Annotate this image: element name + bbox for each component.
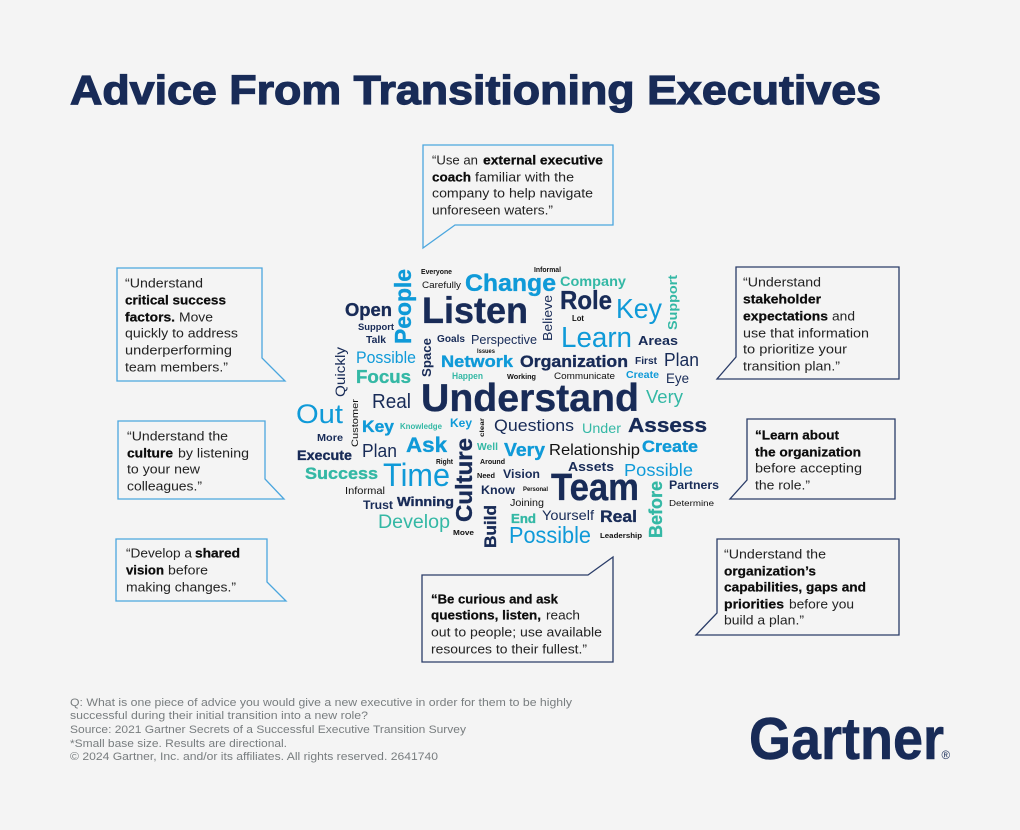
callout: stakeholder expectations: transition plan.” xyxy=(743,359,840,374)
callout: stakeholder expectations: “Understand xyxy=(743,275,821,290)
footnote: *Small base size. Results are directional. xyxy=(70,738,287,750)
word cloud: Everyone xyxy=(421,267,452,276)
callout: capabilities, gaps and priorities: capabilities, gaps and xyxy=(724,580,866,595)
word cloud: Trust xyxy=(363,500,393,512)
footnote: successful during their initial transition into a new role? xyxy=(70,710,368,722)
word: Understand: Understand xyxy=(421,377,639,420)
word cloud: Support xyxy=(665,274,680,330)
callout: shared vision: “Develop a xyxy=(126,546,193,561)
word cloud: Possible xyxy=(624,460,693,480)
word cloud: Organization xyxy=(520,352,628,371)
word cloud: Questions xyxy=(494,416,574,435)
word cloud: Know xyxy=(481,485,515,497)
callout: stakeholder expectations: to prioritize your xyxy=(743,342,848,357)
word: Change: Change xyxy=(465,270,556,297)
word cloud: Lot xyxy=(572,314,584,323)
word cloud: Believe xyxy=(540,295,555,341)
callout: external executive coach: external executive xyxy=(483,153,603,168)
callout: capabilities, gaps and priorities: “Understand the xyxy=(724,547,826,562)
word cloud: Role xyxy=(560,285,612,315)
word: Listen: Listen xyxy=(422,290,528,331)
word cloud: Eye xyxy=(666,370,689,386)
callout: shared vision xyxy=(116,539,286,601)
callout: learn about the organization: the role.” xyxy=(755,478,810,493)
callout: stakeholder expectations: use that information xyxy=(743,326,869,341)
word cloud: Issues xyxy=(477,348,495,355)
callout: be curious and ask questions xyxy=(422,557,613,662)
callout: external executive coach: familiar with the xyxy=(475,170,574,185)
word cloud: Personal xyxy=(523,487,548,493)
callout: be curious and ask questions: reach xyxy=(546,608,580,623)
word cloud: Vision xyxy=(503,467,540,481)
word cloud: Key xyxy=(362,417,395,436)
word cloud: Partners xyxy=(669,480,719,492)
callout: culture: by listening xyxy=(178,446,249,461)
word cloud: Key xyxy=(616,293,662,324)
footnote: Source: 2021 Gartner Secrets of a Successful Executive Transition Survey xyxy=(70,724,466,736)
callout: critical success factors: underperforming xyxy=(125,343,232,358)
word cloud: Out xyxy=(296,399,344,429)
callout: critical success factors: team members.” xyxy=(125,360,228,375)
callout: learn about the organization xyxy=(730,419,895,499)
word cloud xyxy=(296,267,719,548)
word cloud: Under xyxy=(582,420,621,436)
word cloud: Well xyxy=(477,441,498,453)
word cloud: Areas xyxy=(638,333,678,348)
word cloud: Talk xyxy=(366,335,386,346)
word cloud: Very xyxy=(504,440,545,460)
word cloud: Focus xyxy=(356,367,411,387)
word cloud: Right xyxy=(436,459,454,466)
word cloud: Company xyxy=(560,273,626,289)
callout: external executive coach: company to help navigate xyxy=(432,186,593,201)
footnote: © 2024 Gartner, Inc. and/or its affiliates. All rights reserved. 2641740 xyxy=(70,751,438,763)
word cloud: Time xyxy=(383,457,450,493)
word cloud: Open xyxy=(345,300,392,320)
callout: critical success factors: critical success xyxy=(125,293,226,308)
word cloud: Communicate xyxy=(554,371,615,381)
word cloud: Customer xyxy=(350,399,361,447)
callout: external executive coach xyxy=(423,145,613,248)
callout: shared vision: vision xyxy=(126,563,164,578)
word cloud: Network xyxy=(441,352,514,371)
word cloud: Possible xyxy=(509,522,591,548)
word cloud: Real xyxy=(600,507,637,526)
callout: critical success factors: quickly to address xyxy=(125,326,239,341)
word cloud: Knowledge xyxy=(400,422,443,431)
word cloud: Working xyxy=(507,374,536,381)
word cloud: Assets xyxy=(568,460,614,474)
word cloud: Carefully xyxy=(422,280,462,290)
callout: learn about the organization: “Learn about xyxy=(755,428,840,443)
callout: culture: culture xyxy=(127,446,173,461)
word cloud: Ask xyxy=(406,434,447,457)
callout: be curious and ask questions: resources to their fullest.” xyxy=(431,642,587,657)
word cloud: Move xyxy=(453,528,474,537)
Gartner logo: ® xyxy=(942,750,950,762)
word cloud: Space xyxy=(420,338,434,377)
word cloud: Need xyxy=(477,473,495,480)
word cloud: Informal xyxy=(345,486,385,497)
callout: critical success factors: Move xyxy=(179,310,213,325)
footnote: Q: What is one piece of advice you would give a new executive in order for them to be highly xyxy=(70,697,572,709)
word cloud: Create xyxy=(626,369,659,381)
word cloud: Quickly xyxy=(332,347,348,397)
callout: capabilities, gaps and priorities: priorities xyxy=(724,597,784,612)
word cloud: Yourself xyxy=(542,507,594,523)
word cloud: Key xyxy=(450,416,472,430)
callout: learn about the organization: before accepting xyxy=(755,461,862,476)
word cloud: Happen xyxy=(452,371,483,381)
word cloud: More xyxy=(317,432,343,444)
word cloud: Build xyxy=(481,505,500,548)
word: Culture: Culture xyxy=(451,438,477,522)
word: Team: Team xyxy=(551,467,639,509)
Gartner logo: Gartner xyxy=(749,706,944,772)
word cloud: Informal xyxy=(534,267,561,274)
callout: external executive coach: coach xyxy=(432,170,471,185)
word cloud: Goals xyxy=(437,334,465,345)
word cloud: Create xyxy=(642,438,698,456)
word cloud: Determine xyxy=(669,498,714,508)
callout: critical success factors: “Understand xyxy=(125,276,203,291)
callout: be curious and ask questions: “Be curious and ask xyxy=(431,592,559,607)
callout: capabilities, gaps and priorities: build a plan.” xyxy=(724,613,804,628)
word cloud: Possible xyxy=(356,348,416,367)
callout: be curious and ask questions: out to people; use available xyxy=(431,625,602,640)
callout: capabilities, gaps and priorities: organization’s xyxy=(724,564,816,579)
callout: critical success factors xyxy=(117,268,285,381)
callout: capabilities, gaps and priorities xyxy=(696,539,899,635)
callout: stakeholder expectations: expectations xyxy=(743,309,828,324)
word: People: People xyxy=(390,269,416,344)
callout: learn about the organization: the organization xyxy=(755,445,861,460)
word cloud: Success xyxy=(305,465,378,483)
word cloud: Develop xyxy=(378,512,450,533)
word cloud: clear xyxy=(479,417,486,437)
word cloud: First xyxy=(635,356,658,367)
word cloud: Real xyxy=(372,391,411,413)
word cloud: Support xyxy=(358,322,394,332)
title: Advice From Transitioning Executives xyxy=(70,67,881,113)
callout: external executive coach: “Use an xyxy=(432,153,478,168)
callout: shared vision: before xyxy=(168,563,208,578)
callout: culture: colleagues.” xyxy=(127,479,202,494)
callout: be curious and ask questions: questions, listen, xyxy=(431,608,541,623)
callout: stakeholder expectations: and xyxy=(832,309,855,324)
word cloud: Plan xyxy=(362,441,397,461)
footnote xyxy=(70,697,572,763)
word cloud: End xyxy=(511,511,536,526)
word cloud: Joining xyxy=(510,498,544,509)
callout: stakeholder expectations xyxy=(717,267,899,379)
word cloud: Assess xyxy=(628,415,707,437)
word cloud: Very xyxy=(646,387,683,407)
word cloud: Learn xyxy=(561,322,632,354)
word cloud: Before xyxy=(646,481,666,538)
callout: culture: “Understand the xyxy=(127,429,228,444)
word cloud: Around xyxy=(480,459,505,466)
word cloud: Winning xyxy=(397,494,454,509)
word cloud: Perspective xyxy=(471,332,537,347)
word cloud: Leadership xyxy=(600,531,642,540)
word cloud: Relationship xyxy=(549,442,640,459)
callout: stakeholder expectations: stakeholder xyxy=(743,292,821,307)
callout: critical success factors: factors. xyxy=(125,310,175,325)
callout: shared vision: shared xyxy=(195,546,240,561)
word cloud: Plan xyxy=(664,350,699,370)
callout: capabilities, gaps and priorities: before you xyxy=(789,597,854,612)
callout: external executive coach: unforeseen waters.” xyxy=(432,203,553,218)
callout: culture xyxy=(118,421,284,499)
callout: culture: to your new xyxy=(127,462,201,477)
word cloud: Execute xyxy=(297,448,353,463)
callout: shared vision: making changes.” xyxy=(126,580,236,595)
